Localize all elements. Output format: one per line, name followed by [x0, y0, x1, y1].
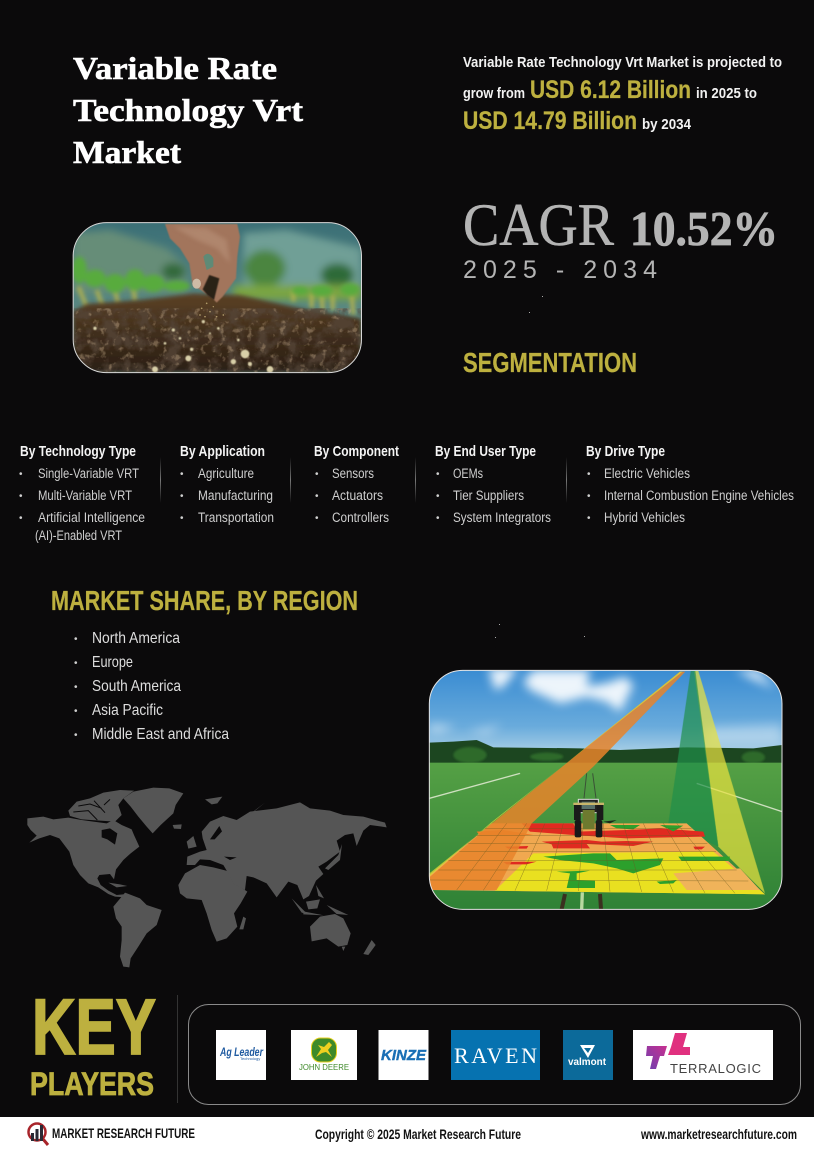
- segment column: By Drive Type: [586, 443, 794, 525]
- segment column: By Drive Type: •: [587, 469, 591, 480]
- segment column: By Technology Type: Artificial Intelligence: [38, 510, 145, 525]
- logo: Valmont: valmont: [568, 1057, 607, 1068]
- logo: Kinze: [378, 1030, 428, 1080]
- footer bar: [0, 1117, 814, 1150]
- market share heading: MARKET SHARE, BY REGION: [51, 585, 358, 616]
- segment column: By End User Type: By End User Type: [435, 443, 536, 460]
- segment column: By Technology Type: By Technology Type: [20, 443, 136, 460]
- segment column: By Application: •: [180, 491, 184, 502]
- world map: [27, 788, 387, 967]
- segment column: By Drive Type: Hybrid Vehicles: [604, 510, 685, 525]
- CAGR figure: 10.52%: [630, 201, 778, 256]
- field grid: [429, 823, 765, 894]
- segmentation heading: SEGMENTATION: [463, 347, 637, 378]
- specks: [495, 296, 585, 638]
- region list: [74, 630, 229, 743]
- segment column: By End User Type: [435, 443, 551, 525]
- region list: •: [74, 730, 78, 741]
- logo: John Deere: JOHN DEERE: [299, 1063, 349, 1072]
- segment column: By Drive Type: •: [587, 513, 591, 524]
- segment column: By Component: Controllers: [332, 510, 389, 525]
- region list: Europe: [92, 654, 133, 671]
- segment column: By Application: By Application: [180, 443, 265, 460]
- CAGR figure: CAGR: [463, 192, 614, 258]
- segment column: By Drive Type: •: [587, 491, 591, 502]
- segment column: By Technology Type: •: [19, 513, 23, 524]
- title: Technology Vrt: [73, 92, 303, 128]
- segment column: By Application: Transportation: [198, 510, 274, 525]
- logo: Terralogic: TERRALOGIC: [670, 1061, 761, 1076]
- logo: Valmont: [563, 1030, 613, 1080]
- market projection text: by 2034: [642, 116, 692, 133]
- segment column: By End User Type: OEMs: [453, 466, 483, 481]
- segment column: By End User Type: Tier Suppliers: [453, 488, 524, 503]
- market projection text: in 2025 to: [696, 85, 757, 102]
- key players heading: [30, 982, 156, 1102]
- region list: Asia Pacific: [92, 702, 163, 719]
- market projection text: USD 6.12 Billion: [530, 76, 691, 104]
- segment column: By Component: Actuators: [332, 488, 383, 503]
- segment column: By End User Type: •: [436, 513, 440, 524]
- logo: Ag Leader: [216, 1030, 266, 1080]
- logo: Ag Leader: Technology: [240, 1056, 260, 1061]
- title: Market: [73, 134, 181, 170]
- photo: hand sowing seeds in soil: [72, 223, 361, 373]
- region list: •: [74, 706, 78, 717]
- region list: Middle East and Africa: [92, 726, 229, 743]
- market projection text: grow from: [463, 85, 525, 102]
- region list: •: [74, 634, 78, 645]
- logo: Kinze: KINZE: [381, 1047, 427, 1064]
- title: Variable Rate: [73, 50, 277, 86]
- CAGR figure: 2025 - 2034: [463, 256, 657, 284]
- segment column: By Component: [314, 443, 399, 525]
- segment column: By Technology Type: Multi-Variable VRT: [38, 488, 132, 503]
- segment column: By Application: Agriculture: [198, 466, 254, 481]
- logo: Raven: [451, 1030, 540, 1080]
- segment column: By Component: •: [315, 469, 319, 480]
- segment column: By Application: [180, 443, 274, 525]
- segment column: By Drive Type: Electric Vehicles: [604, 466, 690, 481]
- key players heading: KEY: [32, 982, 156, 1071]
- segment column: By Technology Type: •: [19, 469, 23, 480]
- region list: North America: [92, 630, 180, 647]
- copyright: Copyright © 2025 Market Research Future: [315, 1126, 521, 1142]
- segment column: By End User Type: •: [436, 469, 440, 480]
- key players heading: PLAYERS: [30, 1066, 154, 1102]
- logo: Terralogic: [633, 1030, 773, 1080]
- segment column: By Application: •: [180, 469, 184, 480]
- segment column: By Application: •: [180, 513, 184, 524]
- logo: Ag Leader: Ag Leader: [219, 1045, 264, 1059]
- segment column: By Drive Type: By Drive Type: [586, 443, 665, 460]
- segment column: By Technology Type: Single-Variable VRT: [38, 466, 139, 481]
- segment column: By End User Type: •: [436, 491, 440, 502]
- logo: Market Research Future: [28, 1124, 195, 1145]
- segment column: By Application: Manufacturing: [198, 488, 273, 503]
- region list: •: [74, 682, 78, 693]
- key players logo panel: [188, 1004, 800, 1104]
- logo: Raven: RAVEN: [454, 1043, 537, 1068]
- region list: •: [74, 658, 78, 669]
- logo: John Deere: [291, 1030, 357, 1080]
- title: [73, 50, 303, 170]
- segment column: By Component: By Component: [314, 443, 399, 460]
- segment column: By End User Type: System Integrators: [453, 510, 551, 525]
- segment column: By Technology Type: (AI)-Enabled VRT: [35, 528, 122, 543]
- tractor: [573, 773, 617, 837]
- logo: Market Research Future: MARKET RESEARCH FUTURE: [52, 1125, 195, 1141]
- segment column: By Technology Type: •: [19, 491, 23, 502]
- segment column: By Component: •: [315, 513, 319, 524]
- segment column: By Technology Type: [19, 443, 145, 543]
- segment column: By Component: Sensors: [332, 466, 374, 481]
- market projection text: [463, 54, 782, 135]
- sensor beams: [694, 671, 765, 893]
- CAGR figure: [463, 192, 778, 284]
- segment column: By Component: •: [315, 491, 319, 502]
- photo: tractor with variable rate field map: [429, 668, 782, 909]
- market projection text: USD 14.79 Billion: [463, 107, 637, 135]
- region list: South America: [92, 678, 181, 695]
